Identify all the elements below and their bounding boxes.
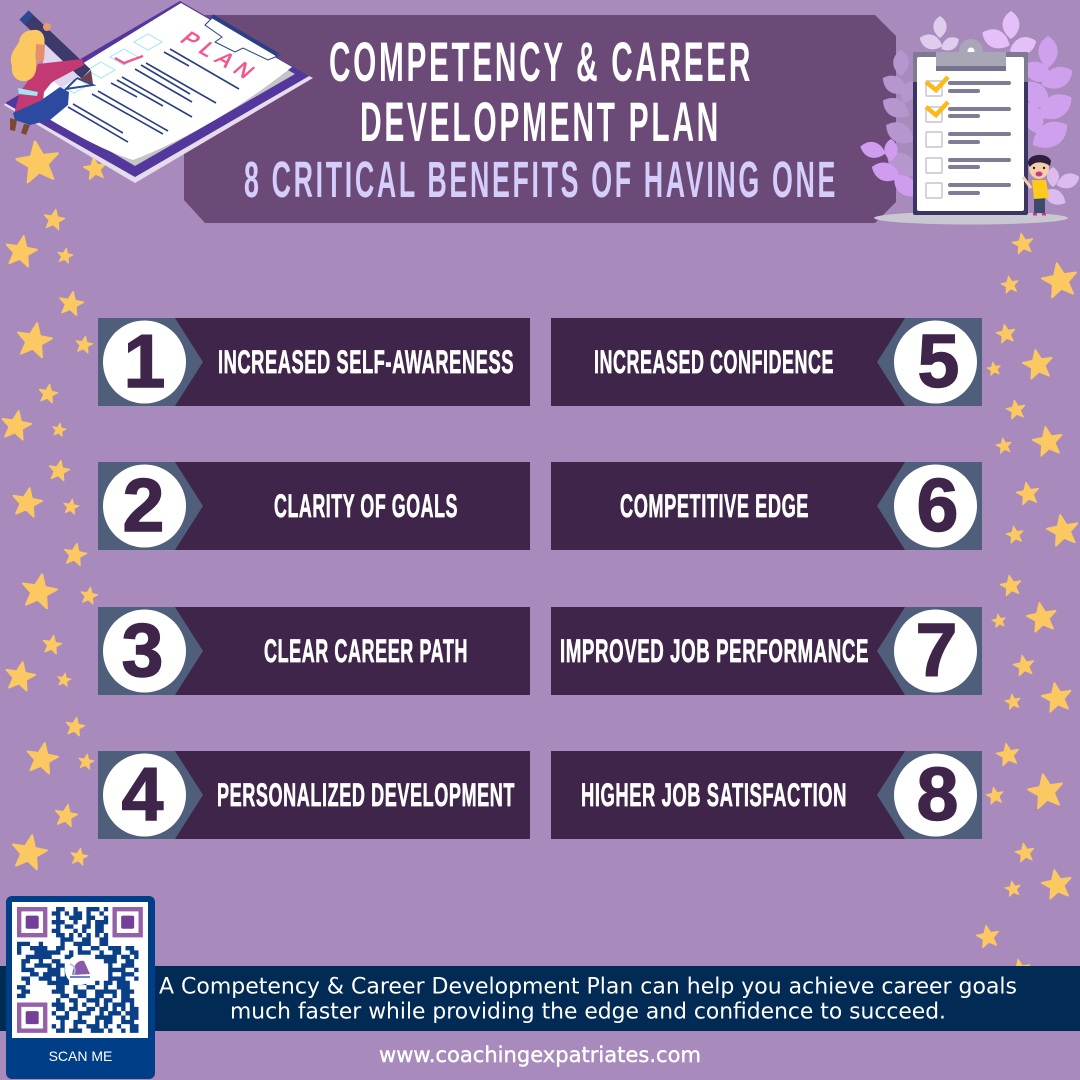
illustration: plan clipboard with woman: PLAN bbox=[175, 27, 266, 86]
illustration: checklist clipboard bbox=[874, 39, 1068, 224]
card 4 bbox=[98, 751, 530, 839]
illustration: leaves behind checklist bbox=[858, 11, 1080, 209]
card 1 bbox=[98, 318, 530, 406]
card 3 bbox=[98, 607, 530, 695]
card 3: 3 bbox=[122, 608, 163, 692]
card 7: IMPROVED JOB PERFORMANCE bbox=[560, 633, 869, 669]
stars: left column bbox=[0, 139, 107, 870]
stars: right column bbox=[975, 232, 1080, 980]
illustration: boy bbox=[1023, 155, 1051, 216]
footer message bar bbox=[0, 966, 1080, 1031]
card 2: 2 bbox=[123, 463, 164, 547]
footer message bar: much faster while providing the edge and confidence to succeed. bbox=[230, 1000, 946, 1024]
card 7: 7 bbox=[916, 608, 957, 692]
card 5: 5 bbox=[918, 319, 959, 403]
card 8: HIGHER JOB SATISFACTION bbox=[581, 777, 847, 813]
card 5: INCREASED CONFIDENCE bbox=[594, 344, 834, 380]
card 6: COMPETITIVE EDGE bbox=[620, 488, 809, 524]
title bbox=[329, 30, 753, 153]
website url: www.coachingexpatriates.com bbox=[379, 1043, 701, 1068]
card 1: INCREASED SELF-AWARENESS bbox=[218, 344, 514, 380]
card 5 bbox=[551, 318, 982, 406]
card 7 bbox=[551, 607, 982, 695]
card 4: 4 bbox=[122, 752, 164, 836]
title: DEVELOPMENT PLAN bbox=[360, 90, 721, 153]
card 2: CLARITY OF GOALS bbox=[274, 488, 458, 524]
card 1: 1 bbox=[124, 319, 165, 403]
footer message bar: A Competency & Career Development Plan can help you achieve career goals bbox=[159, 974, 1017, 1000]
QR logo bbox=[65, 955, 95, 985]
card 8 bbox=[551, 751, 982, 839]
panel: header banner bbox=[184, 15, 896, 223]
card 2 bbox=[98, 462, 530, 550]
card 3: CLEAR CAREER PATH bbox=[264, 633, 468, 669]
card 6: 6 bbox=[917, 463, 958, 547]
card 4: PERSONALIZED DEVELOPMENT bbox=[217, 777, 515, 813]
QR code card: SCAN ME bbox=[49, 1048, 112, 1064]
card 6 bbox=[551, 462, 982, 550]
illustration: plan clipboard with woman bbox=[4, 1, 313, 183]
QR code card bbox=[6, 896, 155, 1079]
card 8: 8 bbox=[917, 752, 958, 836]
